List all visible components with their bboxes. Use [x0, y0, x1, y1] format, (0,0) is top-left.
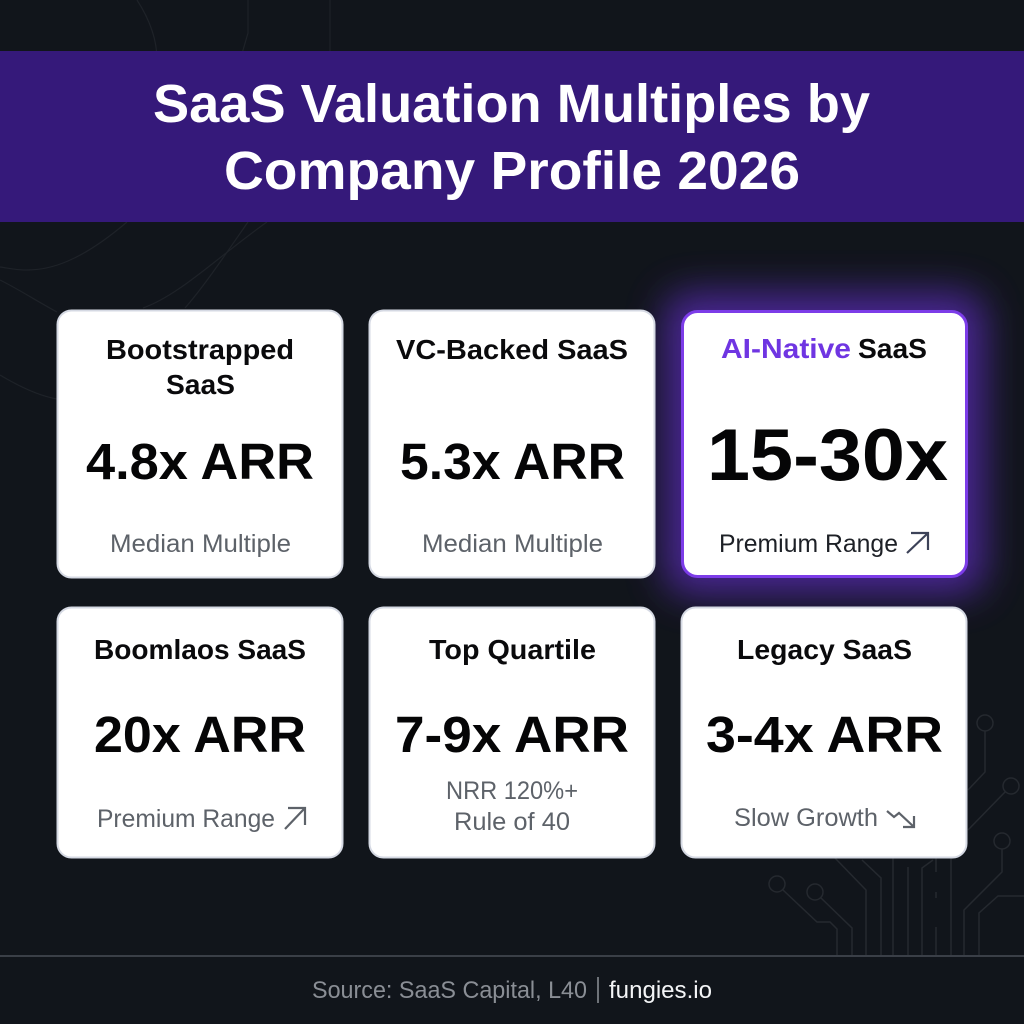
- panel: Bootstrapped SaaS: Bootstrapped: [106, 334, 294, 365]
- icon: up-right arrow: [907, 533, 928, 553]
- title: SaaS Valuation Multiples by: [153, 74, 870, 134]
- title: [153, 74, 870, 201]
- panel: AI-Native SaaS (highlighted): AI-Native: [721, 333, 851, 364]
- background circuit pattern: top left: [0, 0, 330, 399]
- panel: VC-Backed SaaS: [370, 310, 654, 578]
- panel: VC-Backed SaaS: Median Multiple: [422, 530, 603, 558]
- panel: Boomlaos SaaS: Boomlaos SaaS: [94, 634, 306, 665]
- panel: Legacy SaaS: 3-4x ARR: [706, 706, 943, 763]
- background circuit pattern: bottom right: [769, 715, 1024, 956]
- panel: VC-Backed SaaS: 5.3x ARR: [400, 433, 625, 490]
- panel: Bootstrapped SaaS: 4.8x ARR: [86, 433, 314, 490]
- panel: Legacy SaaS: [682, 608, 966, 858]
- footer divider: [0, 955, 1024, 957]
- title banner: [0, 51, 1024, 222]
- panel: AI-Native SaaS (highlighted): SaaS: [858, 333, 927, 364]
- panel: Boomlaos SaaS: 20x ARR: [94, 706, 306, 763]
- panel: Bootstrapped SaaS: SaaS: [166, 369, 235, 400]
- panel: Legacy SaaS: Legacy SaaS: [737, 634, 912, 665]
- icon: down-right trend arrow: [887, 811, 914, 827]
- panel: VC-Backed SaaS: VC-Backed SaaS: [396, 334, 628, 365]
- panel: AI-Native SaaS (highlighted): 15-30x: [707, 415, 948, 496]
- panel: Top Quartile: 7-9x ARR: [395, 706, 629, 763]
- footer source line: Source: SaaS Capital, L40: [312, 977, 587, 1004]
- panel: Top Quartile: Rule of 40: [454, 808, 570, 836]
- title: Company Profile 2026: [224, 141, 800, 201]
- panel: AI-Native SaaS (highlighted): Premium Range: [719, 530, 898, 558]
- panel: Bootstrapped SaaS: Median Multiple: [110, 530, 291, 558]
- panel: Bootstrapped SaaS: [58, 310, 342, 578]
- panel: Legacy SaaS: Slow Growth: [734, 804, 878, 832]
- panel: Top Quartile: Top Quartile: [429, 634, 596, 665]
- footer source line: fungies.io: [609, 977, 712, 1004]
- panel: AI-Native SaaS (highlighted): [664, 292, 985, 595]
- panel: Boomlaos SaaS: Premium Range: [97, 805, 275, 833]
- panel: Boomlaos SaaS: [58, 608, 342, 858]
- panel: Top Quartile: NRR 120%+: [446, 777, 578, 805]
- panel: Top Quartile: [370, 608, 654, 858]
- icon: up-right arrow: [285, 808, 305, 829]
